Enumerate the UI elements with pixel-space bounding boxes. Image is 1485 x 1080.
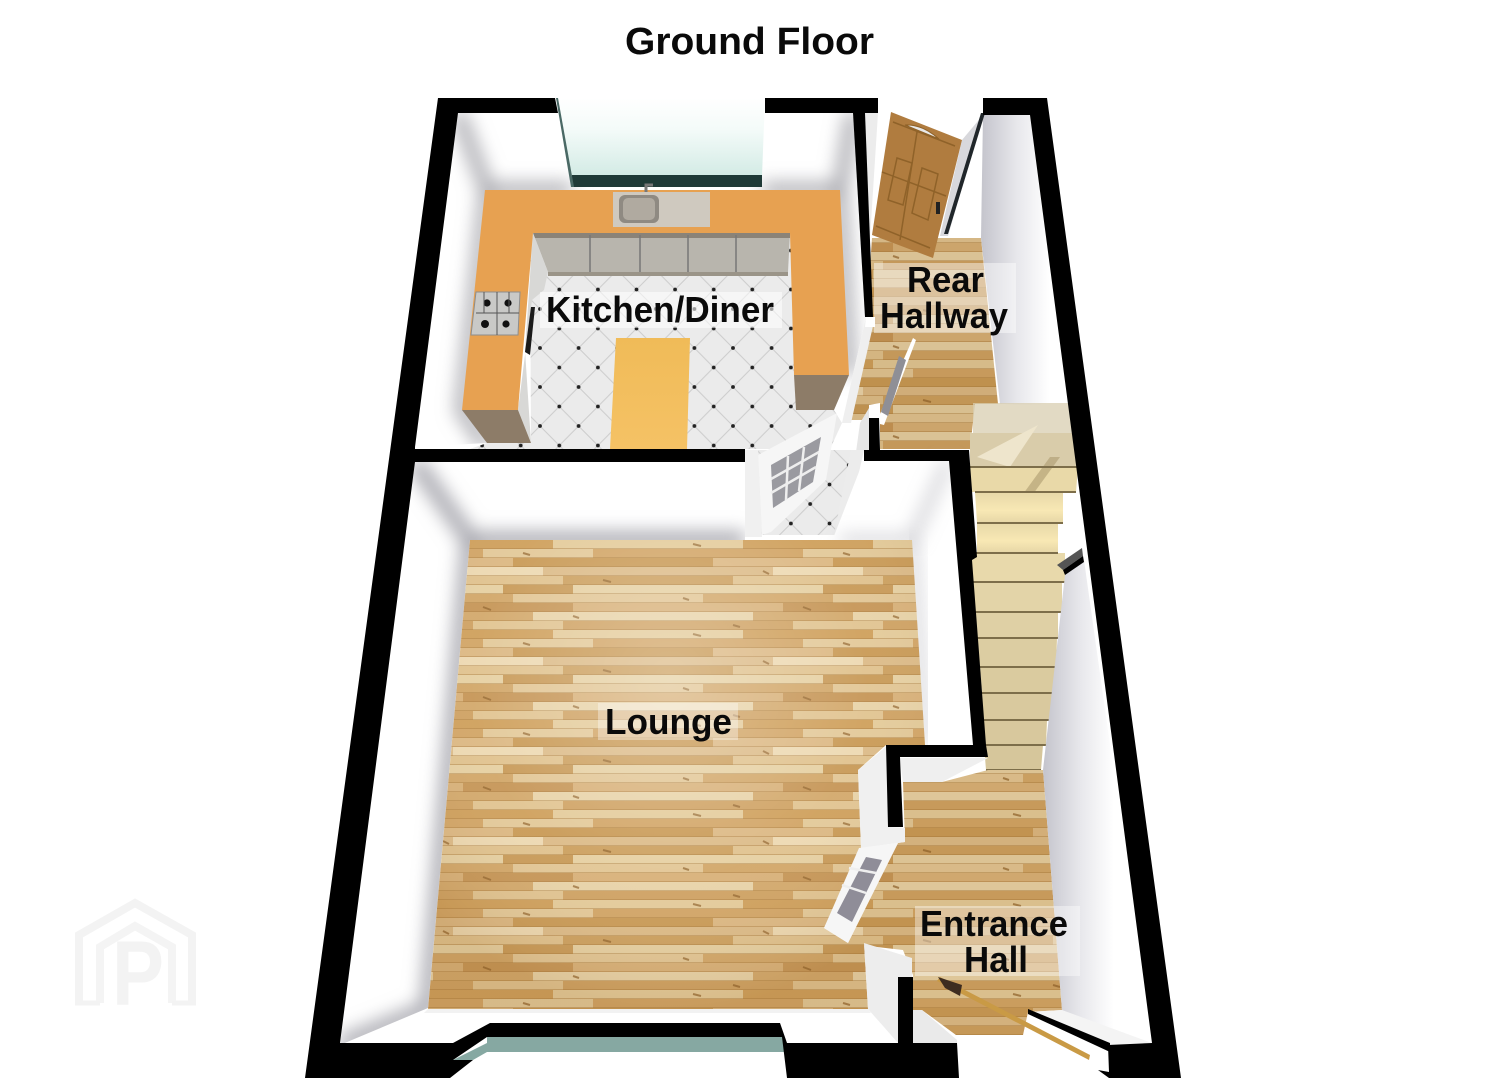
doorway: kitchen to lounge xyxy=(745,413,864,537)
hob xyxy=(471,292,520,335)
stub wall faces xyxy=(900,758,988,782)
internal wall between kitchen and hallway xyxy=(853,113,873,317)
kitchen window xyxy=(555,98,765,187)
label: Rear Hallway: Rear xyxy=(907,259,984,300)
wall return at bottom xyxy=(1028,1010,1152,1045)
watermark logo: P xyxy=(112,923,164,1025)
sink xyxy=(613,185,710,227)
rear hall left wall strip xyxy=(865,113,878,317)
base cabinets xyxy=(462,233,849,443)
kitchen walls xyxy=(415,113,866,447)
label: Kitchen/Diner: Kitchen/Diner xyxy=(546,289,774,330)
worktop xyxy=(462,190,849,410)
lounge walls xyxy=(340,462,898,1045)
faded upper treads xyxy=(973,403,1087,433)
hallway door leaf xyxy=(876,338,916,425)
room: lounge xyxy=(340,459,973,1060)
stair stub xyxy=(1057,548,1084,575)
left wall with top return xyxy=(305,98,959,1078)
entrance door edge xyxy=(937,977,1090,1060)
wall stub xyxy=(869,418,880,450)
lower stub wall face xyxy=(864,943,912,1043)
island xyxy=(610,338,690,449)
lounge front wall top shadow xyxy=(424,1009,871,1013)
staircase xyxy=(968,403,1087,770)
rear hall floor xyxy=(845,238,998,449)
rear hall right wall xyxy=(981,115,1086,540)
label: Entrance Hall: Entrance xyxy=(920,903,1068,944)
hall door leaf xyxy=(824,843,898,943)
kitchen-lounge wall xyxy=(412,449,745,462)
kitchen tiled floor xyxy=(470,233,842,449)
outer walls xyxy=(305,98,1181,1078)
label: Entrance Hall: Hall xyxy=(964,939,1028,980)
entrance door threshold xyxy=(1028,1009,1110,1052)
top wall right of window xyxy=(765,98,878,113)
door leaf xyxy=(758,413,837,535)
doorway: kitchen to hallway xyxy=(842,317,916,452)
door frame strip xyxy=(940,115,983,236)
treads xyxy=(975,492,1063,523)
entrance hall floor xyxy=(848,770,1062,1035)
entrance hall right wall xyxy=(1043,560,1152,1045)
label: Lounge: Lounge xyxy=(605,701,732,742)
label: Entrance Hall xyxy=(915,903,1080,980)
kitchen wall shading xyxy=(458,113,853,447)
lounge wall shading xyxy=(340,461,948,1045)
room: entrance hall xyxy=(824,560,1152,1060)
lounge-hall wall xyxy=(864,450,988,827)
label: Rear Hallway: Hallway xyxy=(880,295,1008,336)
watermark logo xyxy=(75,903,196,1025)
room: rear hallway xyxy=(845,112,1086,540)
room: kitchen/diner xyxy=(415,98,866,449)
lounge floor xyxy=(428,540,925,1009)
label: Rear Hallway xyxy=(874,259,1016,336)
tread edges xyxy=(970,467,1078,770)
rear door xyxy=(872,112,962,258)
right wall xyxy=(983,98,1181,1078)
title: Ground Floor xyxy=(625,21,874,63)
door frame xyxy=(745,450,762,537)
lounge back wall right section xyxy=(834,459,973,745)
lounge bottom window xyxy=(453,1037,785,1060)
oven xyxy=(525,307,535,355)
